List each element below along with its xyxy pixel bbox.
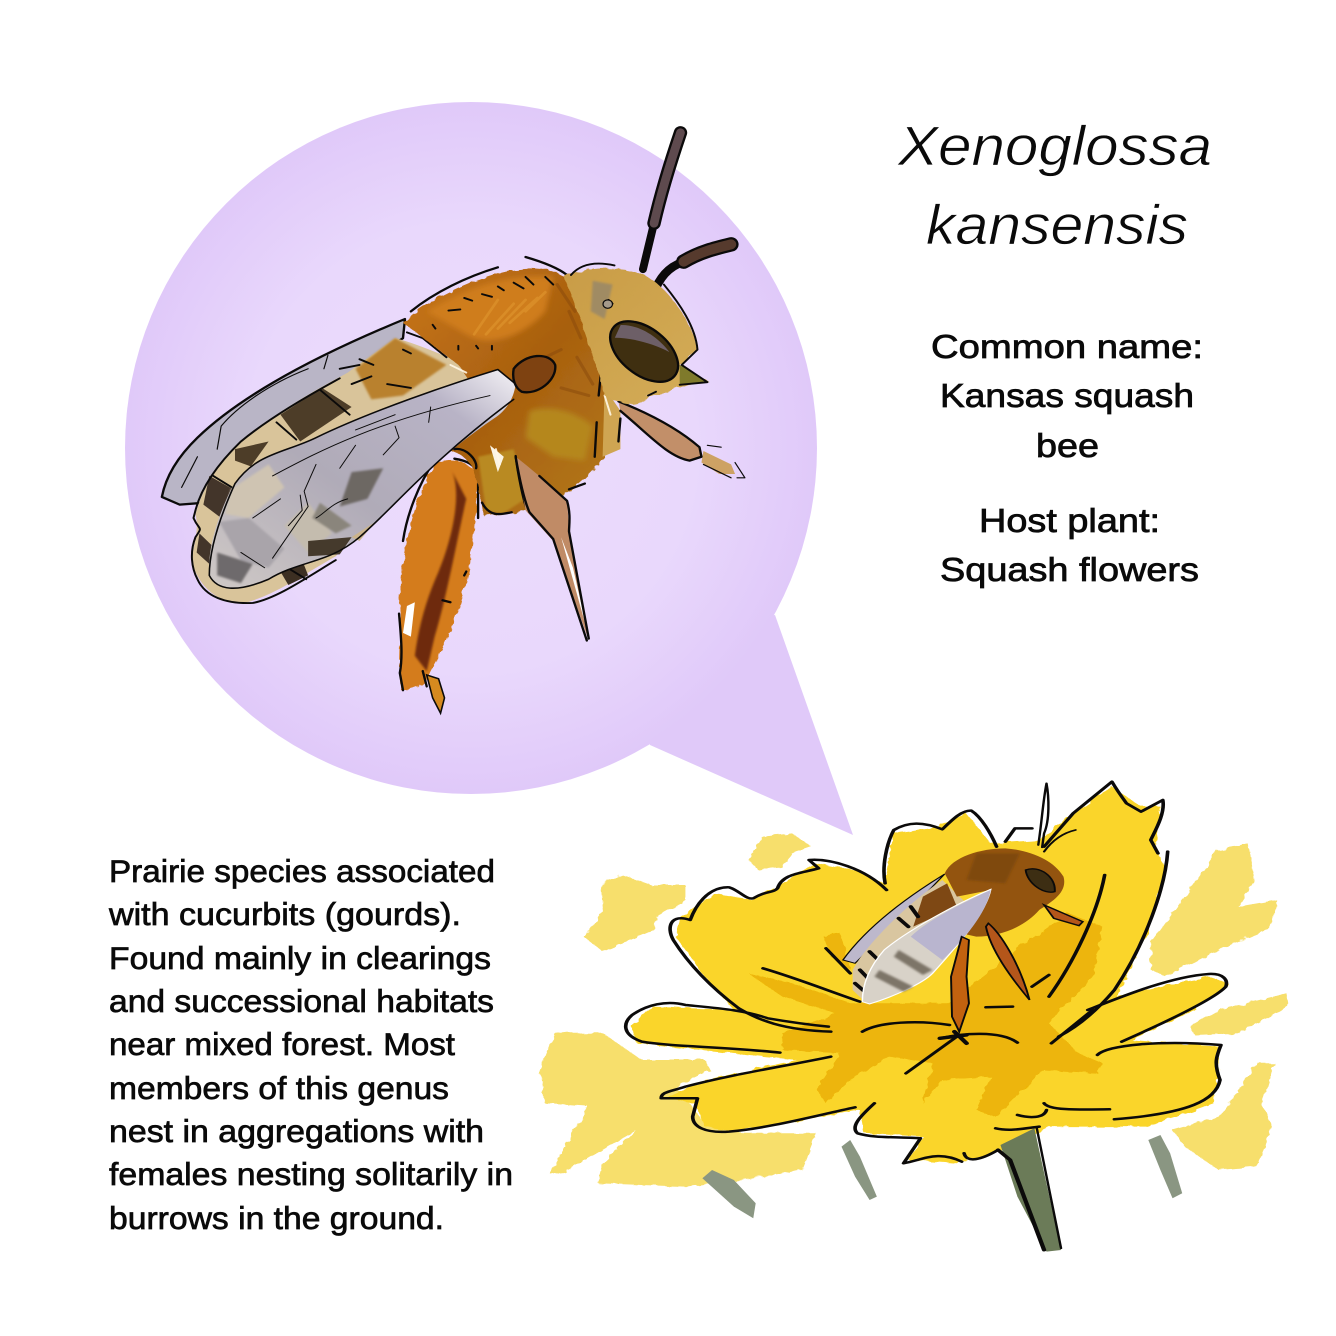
illustration: large bee — [162, 133, 745, 713]
head — [563, 264, 709, 404]
illustration: flower with bee — [540, 782, 1289, 1252]
description: nest in aggregations with — [109, 1113, 484, 1149]
common name: bee — [1036, 427, 1099, 464]
far wing — [843, 874, 945, 963]
common name — [931, 328, 1203, 464]
main petals — [632, 787, 1228, 1163]
description: with cucurbits (gourds). — [108, 896, 461, 932]
description — [108, 853, 513, 1236]
wing — [862, 889, 991, 1004]
thorax — [403, 257, 620, 516]
thorax fur — [474, 292, 545, 334]
flower centre shading — [748, 913, 1102, 1117]
common name: Common name: — [931, 328, 1203, 365]
wing bands — [217, 464, 383, 583]
small bee — [843, 783, 1083, 1043]
legs — [1044, 905, 1083, 926]
description: Prairie species associated — [109, 853, 495, 889]
host plant: Squash flowers — [940, 551, 1199, 588]
antennae — [1038, 783, 1048, 847]
thorax — [945, 848, 1064, 937]
abdomen — [192, 332, 490, 603]
host plant — [940, 502, 1199, 588]
description: burrows in the ground. — [109, 1200, 444, 1236]
distant stems — [702, 1135, 1182, 1218]
host plant: Host plant: — [979, 502, 1160, 539]
speech bubble — [125, 102, 853, 835]
background petals — [540, 833, 1289, 1187]
near wing — [209, 370, 516, 588]
mid leg — [516, 457, 589, 640]
title — [896, 114, 1212, 256]
far wing — [162, 319, 405, 505]
stem — [998, 1128, 1061, 1252]
description: and successional habitats — [109, 983, 494, 1019]
hind leg — [399, 459, 478, 713]
antennae — [643, 133, 731, 296]
eye — [1026, 869, 1055, 892]
abdomen — [853, 880, 967, 1002]
front leg — [618, 401, 745, 478]
tegula — [513, 356, 555, 392]
title: Xenoglossa — [896, 114, 1212, 177]
description: Found mainly in clearings — [109, 940, 491, 976]
title: kansensis — [926, 193, 1188, 256]
description: near mixed forest. Most — [109, 1026, 455, 1062]
description: members of this genus — [109, 1070, 449, 1106]
description: females nesting solitarily in — [109, 1156, 513, 1192]
common name: Kansas squash — [940, 377, 1194, 414]
petal outlines — [626, 782, 1226, 1163]
